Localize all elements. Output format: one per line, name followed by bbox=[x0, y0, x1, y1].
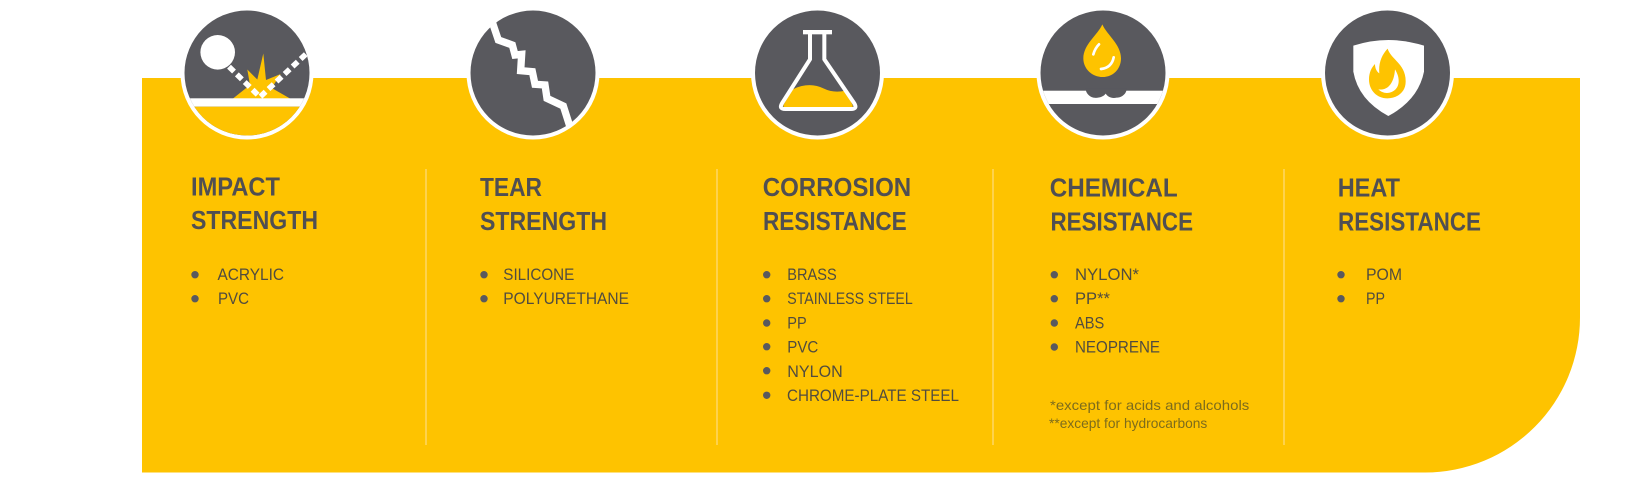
list: impact strength materials: PVC bbox=[218, 289, 249, 308]
list: chemical resistance materials bbox=[1051, 265, 1160, 356]
list: heat resistance materials: POM bbox=[1366, 265, 1402, 284]
list: heat resistance materials bbox=[1337, 265, 1402, 308]
heading: tear strength: TEAR bbox=[480, 172, 542, 202]
list: corrosion resistance materials bbox=[763, 265, 959, 405]
list: tear strength materials: SILICONE bbox=[503, 265, 574, 284]
list: chemical resistance materials: NYLON* bbox=[1075, 265, 1139, 284]
panel: corrosion resistance bbox=[751, 6, 959, 405]
heading: impact strength bbox=[191, 171, 318, 235]
heading: chemical resistance: CHEMICAL bbox=[1050, 172, 1178, 202]
heading: heat resistance: HEAT bbox=[1338, 172, 1400, 202]
list: corrosion resistance materials: PVC bbox=[787, 338, 818, 356]
list: chemical resistance materials: ABS bbox=[1075, 314, 1104, 332]
heading: chemical resistance: RESISTANCE bbox=[1050, 206, 1193, 236]
panel: impact strength bbox=[180, 6, 318, 308]
footnotes bbox=[1049, 397, 1249, 431]
icon: impact bbox=[180, 6, 314, 147]
list: chemical resistance materials: NEOPRENE bbox=[1075, 338, 1160, 356]
list: corrosion resistance materials: BRASS bbox=[787, 265, 837, 284]
icon: flask bbox=[751, 6, 884, 140]
heading: tear strength bbox=[480, 172, 607, 236]
list: heat resistance materials: PP bbox=[1366, 289, 1385, 308]
heading: corrosion resistance bbox=[763, 172, 911, 236]
heading: impact strength: STRENGTH bbox=[191, 205, 318, 235]
icon: tear bbox=[466, 6, 600, 140]
heading: corrosion resistance: CORROSION bbox=[763, 172, 911, 202]
heading: tear strength: STRENGTH bbox=[480, 206, 607, 236]
list: impact strength materials bbox=[191, 265, 284, 308]
heading: heat resistance: RESISTANCE bbox=[1338, 206, 1481, 236]
heading: chemical resistance bbox=[1050, 172, 1193, 236]
icon: flame shield bbox=[1321, 6, 1454, 140]
list: tear strength materials bbox=[480, 265, 629, 308]
list: corrosion resistance materials: STAINLESS STEEL bbox=[787, 289, 913, 308]
footnotes: *except for acids and alcohols bbox=[1050, 397, 1249, 413]
icon: oil drop on surface bbox=[1035, 6, 1171, 140]
panel: chemical resistance bbox=[1035, 6, 1249, 431]
list: corrosion resistance materials: PP bbox=[787, 314, 807, 332]
yellow background panel bbox=[142, 78, 1580, 472]
list: chemical resistance materials: PP** bbox=[1075, 289, 1110, 308]
list: corrosion resistance materials: CHROME-PLATE STEEL bbox=[787, 386, 959, 405]
heading: heat resistance bbox=[1338, 172, 1481, 236]
list: corrosion resistance materials: NYLON bbox=[787, 362, 843, 381]
panel: heat resistance bbox=[1321, 6, 1481, 308]
footnotes: **except for hydrocarbons bbox=[1049, 415, 1207, 431]
heading: corrosion resistance: RESISTANCE bbox=[763, 206, 907, 236]
list: impact strength materials: ACRYLIC bbox=[218, 265, 284, 284]
list: tear strength materials: POLYURETHANE bbox=[503, 289, 629, 308]
heading: impact strength: IMPACT bbox=[191, 171, 280, 201]
panel: tear strength bbox=[466, 6, 629, 308]
